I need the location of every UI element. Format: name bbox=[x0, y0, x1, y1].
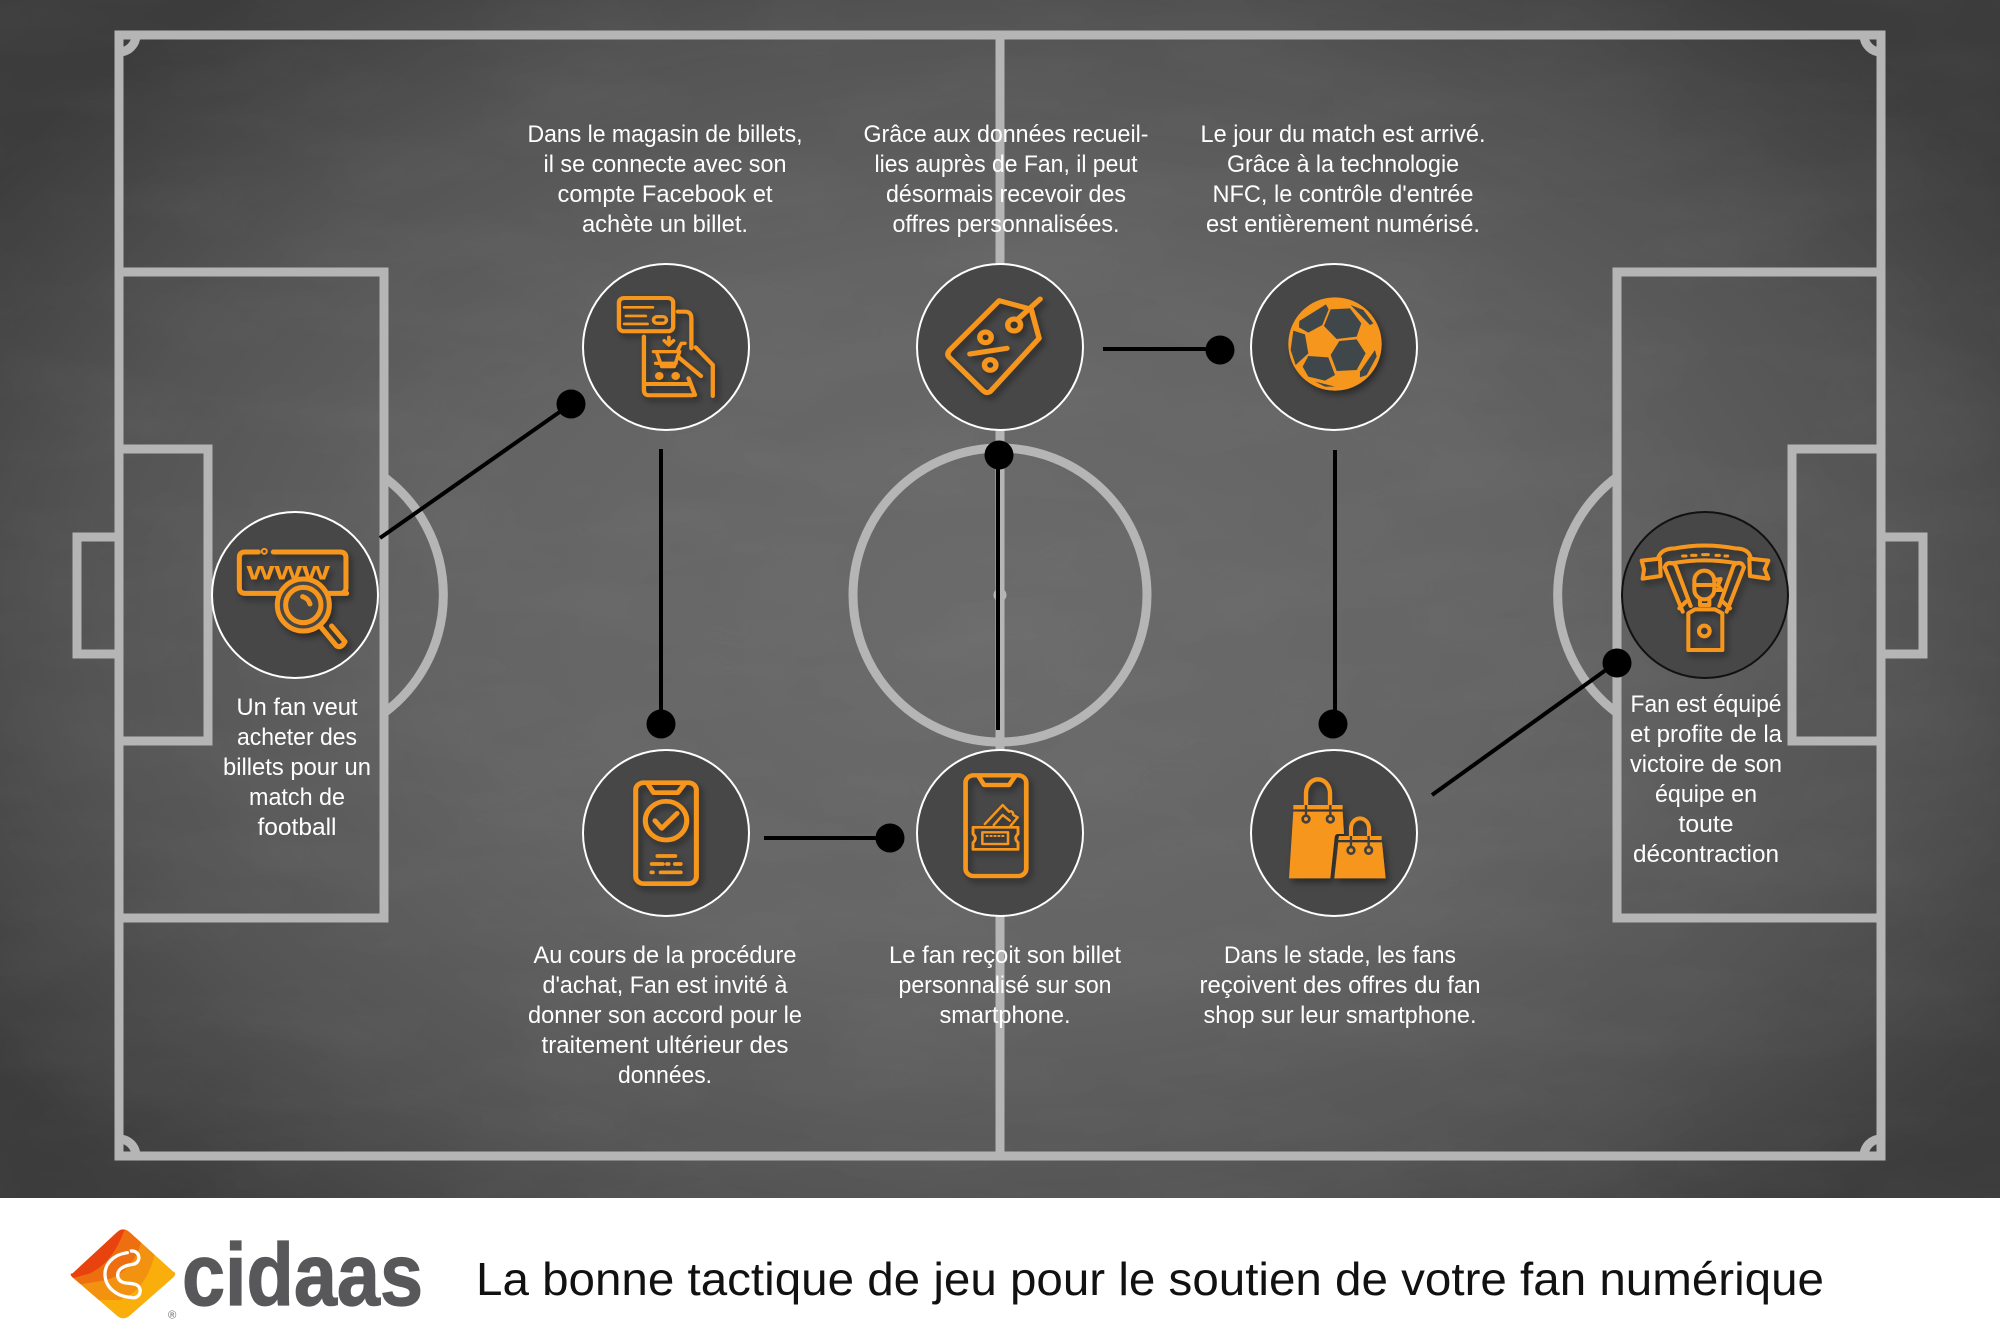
step 6 text: Le jour du match est arrivé. bbox=[1200, 121, 1486, 148]
connector: step 5 to 6 bbox=[1103, 336, 1234, 364]
connector: step 3 to 4 bbox=[764, 824, 904, 852]
icon: card and cart on phone bbox=[619, 298, 713, 396]
step 4 text: smartphone. bbox=[940, 1002, 1070, 1029]
step 1 text: billets pour un bbox=[223, 754, 371, 781]
icon: football bbox=[1288, 297, 1382, 391]
step 4 text: personnalisé sur son bbox=[898, 972, 1112, 999]
step 4: personalised ticket node bbox=[917, 750, 1083, 916]
logo mark: ® bbox=[168, 1310, 177, 1322]
connector: step 6 to 7 bbox=[1318, 450, 1348, 738]
step 5 text: offres personnalisées. bbox=[892, 211, 1120, 238]
step 2 text: compte Facebook et bbox=[558, 181, 773, 208]
step 8 text: et profite de la bbox=[1630, 721, 1783, 748]
step 3 text: d'achat, Fan est invité à bbox=[542, 972, 788, 999]
step 6 text: NFC, le contrôle d'entrée bbox=[1212, 181, 1474, 208]
icon: www search: www bbox=[245, 557, 330, 585]
step 8 text: équipe en bbox=[1655, 781, 1757, 808]
step 5 text: désormais recevoir des bbox=[886, 181, 1126, 208]
connector: step 2 to 3 bbox=[646, 449, 676, 738]
icon: fan with scarf bbox=[1642, 545, 1768, 650]
step 2 text: il se connecte avec son bbox=[544, 151, 786, 178]
icon: www search bbox=[239, 550, 347, 647]
step 5: offers node bbox=[917, 264, 1083, 430]
step 4 text: Le fan reçoit son billet bbox=[889, 942, 1121, 969]
step 3 text: Au cours de la procédure bbox=[534, 942, 796, 969]
step 6 text: est entièrement numérisé. bbox=[1206, 211, 1480, 238]
footer band bbox=[0, 1198, 2000, 1341]
step 6: match day node bbox=[1251, 264, 1417, 430]
step 3 text: données. bbox=[618, 1062, 712, 1089]
logo mark bbox=[70, 1229, 176, 1318]
icon: shopping bags bbox=[1289, 779, 1386, 878]
connector: step 1 to 2 bbox=[380, 390, 586, 538]
step 2 text: achète un billet. bbox=[582, 211, 748, 238]
step 8 text: décontraction bbox=[1633, 841, 1779, 868]
step 5 text: Grâce aux données recueil- bbox=[864, 121, 1148, 148]
step 8 text: toute bbox=[1678, 811, 1734, 838]
step 7 text: Dans le stade, les fans bbox=[1224, 942, 1456, 969]
step 1 text: Un fan veut bbox=[236, 694, 358, 721]
step 8 text: Fan est équipé bbox=[1630, 691, 1782, 718]
footer title: La bonne tactique de jeu pour le soutien de votre fan numérique bbox=[476, 1253, 1824, 1305]
step 7 text: shop sur leur smartphone. bbox=[1204, 1002, 1476, 1029]
icon: phone with ticket bbox=[966, 775, 1026, 876]
step 1 text: match de bbox=[249, 784, 345, 811]
step 2: ticket shop node bbox=[583, 264, 749, 430]
step 1 text: acheter des bbox=[237, 724, 357, 751]
step 1: search node bbox=[212, 512, 378, 678]
step 1 text: football bbox=[258, 814, 336, 841]
step 7: fan shop node bbox=[1251, 750, 1417, 916]
logo: cidaas bbox=[70, 1229, 420, 1318]
icon: discount tag bbox=[948, 299, 1040, 393]
step 2 text: Dans le magasin de billets, bbox=[528, 121, 802, 148]
step 3: consent node bbox=[583, 750, 749, 916]
connector: step 7 to 8 bbox=[1432, 648, 1632, 795]
logo wordmark: cidaas bbox=[182, 1225, 423, 1324]
step 8 text: victoire de son bbox=[1630, 751, 1782, 778]
football pitch markings bbox=[77, 35, 1923, 1156]
step 3 text: traitement ultérieur des bbox=[542, 1032, 788, 1059]
connector: step 4 to 5 bbox=[984, 440, 1014, 730]
step 3 text: donner son accord pour le bbox=[528, 1002, 802, 1029]
step 6 text: Grâce à la technologie bbox=[1227, 151, 1459, 178]
icon: phone with check bbox=[636, 783, 696, 884]
step 5 text: lies auprès de Fan, il peut bbox=[874, 151, 1138, 178]
step 7 text: reçoivent des offres du fan bbox=[1200, 972, 1480, 999]
step 8: happy fan node bbox=[1622, 512, 1788, 678]
